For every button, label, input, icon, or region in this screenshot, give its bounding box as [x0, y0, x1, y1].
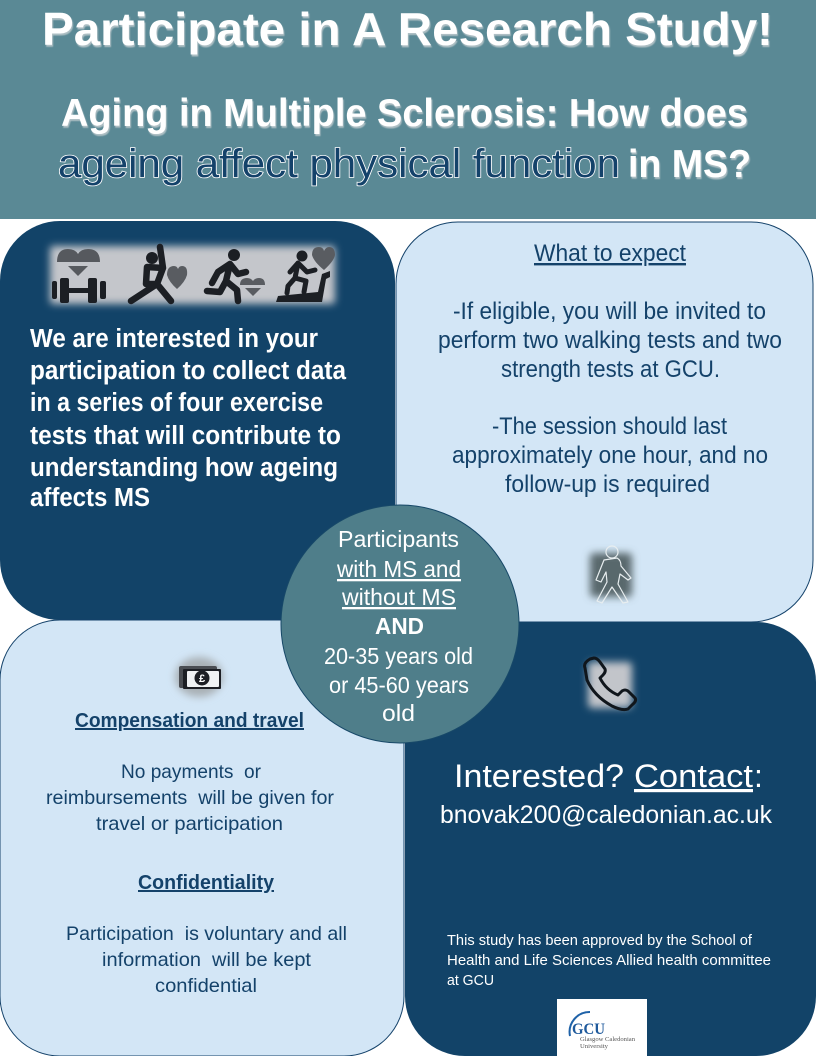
heading: compensation and travel: Compensation and travel: [75, 710, 304, 732]
icon: banknote: [175, 657, 223, 697]
contact heading: [454, 758, 763, 794]
contact heading: Contact: [634, 758, 753, 794]
text block: participants: or 45-60 years: [329, 672, 469, 698]
icon: walking person: [590, 546, 632, 603]
text block: confidentiality: confidential: [155, 975, 257, 997]
text block: participants: [324, 526, 473, 726]
text block: participants: with MS and: [336, 556, 461, 582]
heading: what to expect: What to expect: [534, 240, 686, 267]
text block: session: -The session should last: [492, 413, 727, 440]
text block: interest statement: participation to collect data: [30, 357, 347, 385]
icon: stretching person: [131, 247, 187, 301]
panel: what to expect: [396, 222, 813, 622]
circle: participant criteria: [281, 505, 519, 743]
subtitle: Aging in Multiple Sclerosis: How does: [61, 92, 748, 135]
text block: compensation: reimbursements will be given for: [46, 787, 335, 809]
icon: telephone: [585, 658, 636, 710]
text block: interest statement: in a series of four exercise: [30, 389, 323, 417]
text block: interest statement: affects MS: [30, 484, 150, 512]
text block: confidentiality: Participation is voluntary and all: [66, 923, 347, 945]
panel: interest statement: [0, 221, 395, 620]
text block: eligibility: -If eligible, you will be invited to: [453, 298, 766, 325]
text block: interest statement: understanding how ageing: [30, 454, 338, 482]
text block: participants: old: [382, 700, 415, 726]
logo: GCU: [557, 999, 647, 1056]
text block: compensation: travel or participation: [96, 813, 283, 835]
text block: ethics approval: Health and Life Sciences Allied health committee: [447, 953, 771, 969]
text block: ethics approval: This study has been approved by the School of: [447, 933, 753, 949]
text block: eligibility: perform two walking tests and two: [438, 327, 782, 354]
logo: GCU: Glasgow Caledonian: [580, 1036, 636, 1043]
title: Participate in A Research Study!: [42, 3, 773, 55]
icon strip: exercise icons: [50, 246, 335, 304]
subtitle: ageing affect physical function: [58, 142, 620, 186]
icon: treadmill: [276, 247, 335, 302]
text block: participants: Participants: [338, 526, 459, 552]
text block: interest statement: [30, 325, 347, 512]
contact email: bnovak200@caledonian.ac.uk: [440, 801, 772, 829]
icon: dumbbell and heart: [52, 249, 106, 303]
text block: ethics approval: [447, 933, 771, 989]
panel: compensation and confidentiality: [0, 620, 404, 1056]
contact heading: :: [754, 758, 763, 794]
text block: confidentiality: [66, 923, 347, 997]
text block: session: follow-up is required: [505, 471, 710, 498]
text block: compensation: No payments or: [121, 761, 261, 783]
subtitle: in MS?: [628, 143, 751, 186]
text block: session: [452, 413, 768, 498]
text block: confidentiality: information will be kept: [102, 949, 312, 971]
text block: eligibility: [438, 298, 782, 383]
text block: participants: without MS: [341, 584, 456, 610]
text block: session: approximately one hour, and no: [452, 442, 768, 469]
heading: confidentiality: Confidentiality: [138, 872, 275, 894]
text block: interest statement: tests that will contribute to: [30, 422, 341, 450]
icon: runner: [207, 249, 265, 301]
icon: banknote: £: [199, 673, 205, 685]
header banner: [0, 0, 816, 219]
text block: interest statement: We are interested in your: [30, 325, 318, 353]
logo: GCU: GCU: [572, 1021, 605, 1038]
text block: participants: AND: [375, 613, 424, 639]
panel: contact: [405, 622, 816, 1056]
text block: compensation: [46, 761, 335, 835]
text block: eligibility: strength tests at GCU.: [501, 356, 720, 383]
contact heading: Interested?: [454, 758, 624, 794]
text block: participants: 20-35 years old: [324, 643, 473, 669]
subtitle: [58, 92, 751, 186]
logo: GCU: University: [580, 1043, 609, 1050]
text block: ethics approval: at GCU: [447, 973, 494, 989]
